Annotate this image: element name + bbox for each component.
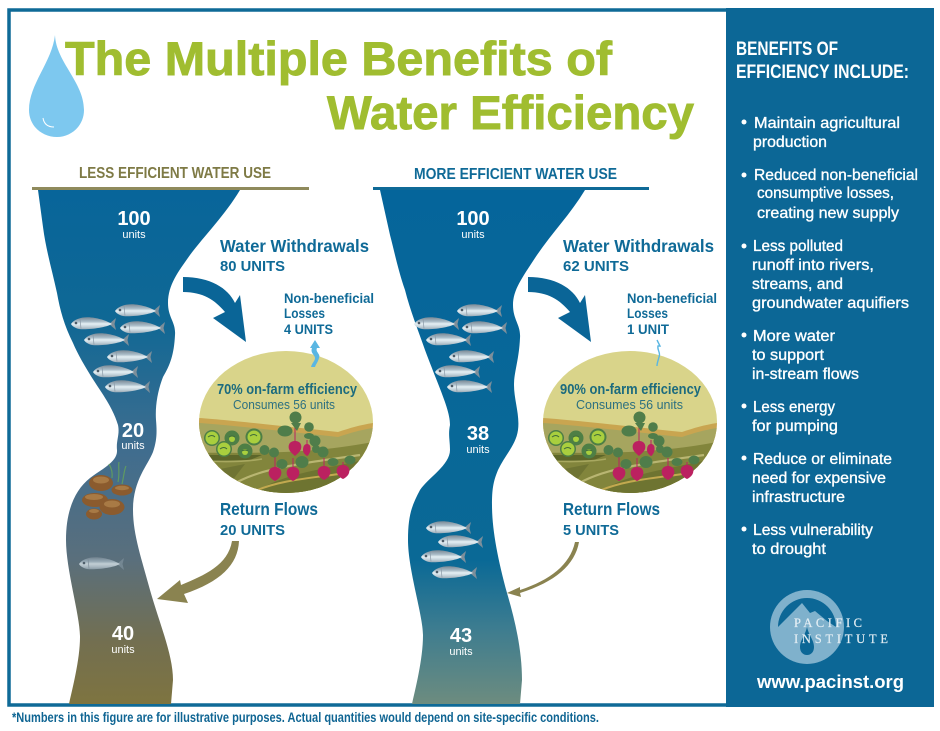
river xyxy=(380,190,585,704)
benefits list: Reduced non-beneficial xyxy=(754,167,918,184)
heading: less efficient: LESS EFFICIENT WATER USE xyxy=(79,165,271,182)
river quantity: 43 units: 43 xyxy=(450,625,472,647)
river quantity: 100 units xyxy=(456,208,490,241)
label: water withdrawals: 80 UNITS xyxy=(220,258,285,275)
fish school xyxy=(71,304,165,393)
river quantity: 20 units xyxy=(121,420,145,452)
label: non-beneficial losses xyxy=(627,290,717,337)
label: water withdrawals xyxy=(563,236,714,275)
river quantity: 38 units: 38 xyxy=(467,423,489,445)
logo: Pacific Institute: INSTITUTE xyxy=(794,632,888,646)
label: non-beneficial losses: 1 UNIT xyxy=(627,321,669,337)
river quantity: 20 units: units xyxy=(121,440,145,452)
upper fish school xyxy=(414,304,507,393)
sidebar heading: EFFICIENCY INCLUDE: xyxy=(736,62,909,83)
farm efficiency label: 70% on-farm efficiency xyxy=(217,382,357,398)
label: return flows xyxy=(563,499,660,539)
label: return flows: 5 UNITS xyxy=(563,522,619,539)
label: return flows xyxy=(220,499,318,539)
title: Water Efficiency xyxy=(327,86,694,139)
river quantity: 100 units: units xyxy=(461,229,485,241)
river quantity: 40 units: 40 xyxy=(112,623,134,645)
river quantity: 43 units: units xyxy=(449,646,473,658)
label: water withdrawals: 62 UNITS xyxy=(563,258,629,275)
sidebar heading xyxy=(736,39,909,83)
label: water withdrawals: Water Withdrawals xyxy=(563,236,714,256)
river quantity: 43 units xyxy=(449,625,473,658)
lower fish school xyxy=(421,521,483,579)
panel: less efficient water use xyxy=(32,165,374,704)
label: return flows: Return Flows xyxy=(563,499,660,519)
panel: more efficient water use xyxy=(373,166,717,704)
farm efficiency label: 90% on-farm efficiency xyxy=(560,382,701,398)
river quantity: 38 units xyxy=(466,423,490,456)
farm efficiency label: Consumes 56 units xyxy=(233,397,335,412)
benefits list: need for expensive xyxy=(752,470,886,487)
logo: Pacific Institute: PACIFIC xyxy=(794,616,862,630)
title: The Multiple Benefits of xyxy=(65,32,612,85)
arrow: return flow xyxy=(507,542,579,597)
arrow: return flow xyxy=(157,541,239,603)
benefits list: production xyxy=(753,134,827,151)
heading: less efficient xyxy=(32,165,309,190)
farm field xyxy=(199,351,373,494)
benefits list: creating new supply xyxy=(757,205,899,222)
footnote: *Numbers in this figure are for illustrative purposes. Actual quantities would depend on site-specific conditions. xyxy=(12,709,599,725)
title xyxy=(65,32,694,139)
heading: more efficient xyxy=(373,166,649,190)
farm field xyxy=(543,351,717,494)
benefits list: for pumping xyxy=(752,418,838,435)
label: non-beneficial losses: Non-beneficial xyxy=(627,290,717,306)
river quantity: 100 units: 100 xyxy=(456,208,490,230)
lone fish xyxy=(79,557,124,570)
label: non-beneficial losses: Non-beneficial xyxy=(284,290,374,306)
icon: vapor arrow xyxy=(657,340,660,366)
farm efficiency label: Consumes 56 units xyxy=(576,397,683,412)
label: non-beneficial losses: 4 UNITS xyxy=(284,321,333,337)
arrow: withdrawals xyxy=(183,277,246,342)
benefits list: Reduce or eliminate xyxy=(753,451,892,468)
label: non-beneficial losses: Losses xyxy=(284,305,325,321)
benefits list xyxy=(742,115,918,558)
website: www.pacinst.org xyxy=(756,672,904,692)
sidebar heading: BENEFITS OF xyxy=(736,39,838,60)
benefits list: streams, and xyxy=(752,276,843,293)
farm efficiency label xyxy=(217,382,357,412)
label: non-beneficial losses: Losses xyxy=(627,305,668,321)
benefits list: runoff into rivers, xyxy=(752,257,874,274)
river xyxy=(38,190,240,704)
benefits list: Less vulnerability xyxy=(753,522,873,539)
river quantity: 100 units: 100 xyxy=(117,208,151,230)
benefits list: groundwater aquifiers xyxy=(752,295,909,312)
panel: benefits sidebar xyxy=(726,8,934,707)
river quantity: 20 units: 20 xyxy=(122,420,144,442)
farm efficiency label xyxy=(560,382,701,412)
river quantity: 40 units xyxy=(111,623,135,656)
icon: water drop xyxy=(29,35,84,137)
benefits list: in-stream flows xyxy=(752,366,859,383)
label: water withdrawals xyxy=(220,236,369,275)
logo: Pacific Institute xyxy=(770,590,888,664)
heading: more efficient: MORE EFFICIENT WATER USE xyxy=(414,166,617,183)
river quantity: 38 units: units xyxy=(466,444,490,456)
river quantity: 100 units xyxy=(117,208,151,241)
rocks and grass xyxy=(82,462,132,520)
label: non-beneficial losses xyxy=(284,290,374,337)
benefits list: consumptive losses, xyxy=(757,185,894,202)
river quantity: 100 units: units xyxy=(122,229,146,241)
benefits list: to drought xyxy=(752,541,827,558)
arrow: withdrawals xyxy=(528,277,591,342)
label: return flows: 20 UNITS xyxy=(220,522,285,539)
benefits list: More water xyxy=(753,328,836,345)
benefits list: to support xyxy=(752,347,825,364)
icon: vapor arrow xyxy=(310,340,320,367)
river quantity: 40 units: units xyxy=(111,644,135,656)
label: water withdrawals: Water Withdrawals xyxy=(220,236,369,256)
benefits list: infrastructure xyxy=(752,489,845,506)
benefits list: Less polluted xyxy=(753,238,843,255)
label: return flows: Return Flows xyxy=(220,499,318,519)
benefits list: Less energy xyxy=(753,399,835,416)
benefits list: Maintain agricultural xyxy=(754,115,900,132)
